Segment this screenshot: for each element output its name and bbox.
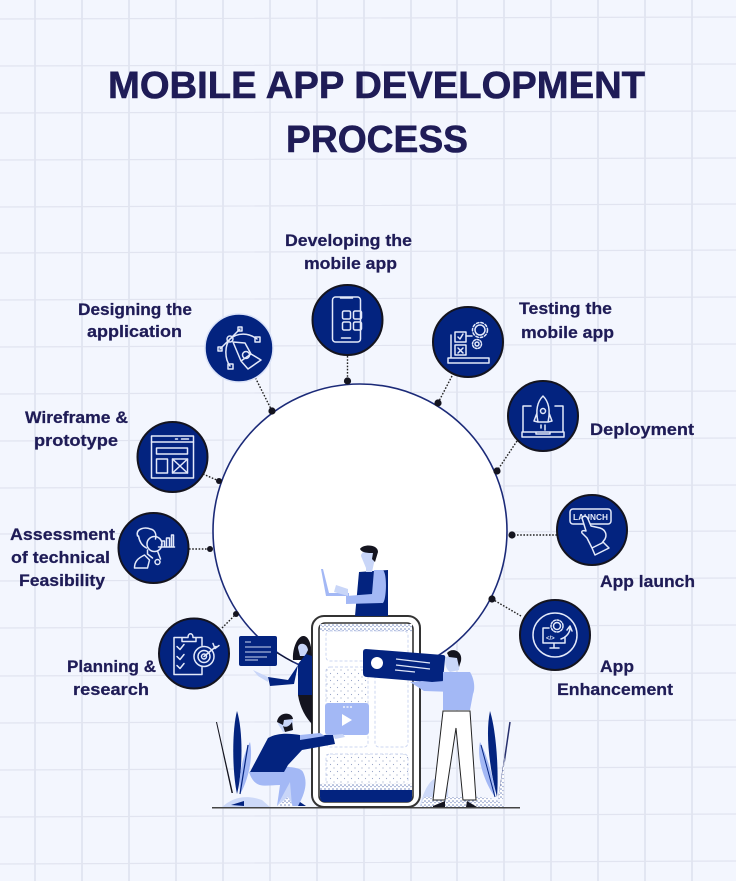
icon: rocket on laptop [508,381,578,451]
icon: monitor with gear [520,600,590,670]
icon: wireframe window [138,422,208,492]
ground shadows [222,778,448,807]
step: developing the mobile app: Developing the [285,231,412,250]
step: deployment: Deployment [590,420,694,439]
step: assessment of technical feasibility: Assessment [10,525,115,544]
step: wireframe and prototype [25,408,208,492]
step: developing the mobile app [285,231,412,355]
title: PROCESS [286,119,468,161]
step: wireframe and prototype: Wireframe & [25,408,128,427]
step: wireframe and prototype: prototype [34,431,118,450]
speech card held by woman [239,636,293,666]
step: planning and research [67,618,229,699]
central white circle [213,384,507,678]
icon: phone with app grid [312,285,382,355]
step: designing the application: Designing the [78,300,192,319]
video card [325,703,369,735]
step: designing the application: application [87,322,182,341]
left plant [216,711,251,794]
right plant [479,711,510,800]
step: developing the mobile app: mobile app [304,254,397,273]
title [108,65,645,161]
step: app launch: App launch [600,572,695,591]
person seated on phone with laptop [321,546,388,616]
step: app enhancement: App [600,657,634,676]
step: assessment of technical feasibility: Feasibility [19,571,106,590]
step: app launch [557,495,695,591]
icon: clipboard with target [159,618,229,688]
step: testing the mobile app [433,299,614,377]
step: testing the mobile app: mobile app [521,323,614,342]
step: planning and research: Planning & [67,657,156,676]
icon: finger pressing launch button: LAUNCH [573,512,608,522]
step: planning and research: research [73,680,149,699]
kneeling man [231,714,345,806]
ground speckle [420,797,505,807]
phone [312,616,420,807]
standing man [410,650,477,807]
banner card [363,649,445,683]
step: testing the mobile app: Testing the [519,299,612,318]
woman beside phone [253,636,312,724]
illustration: team building mobile app [212,546,520,808]
icon: pen tool [205,314,273,382]
step: assessment of technical feasibility [10,513,188,590]
connectors [189,356,557,628]
icon: analyst with magnifier and bars [118,513,188,583]
step: app enhancement [520,600,673,699]
step: app enhancement: Enhancement [557,680,673,699]
step: deployment [508,381,694,451]
icon: monitor with gear: </> [546,636,555,642]
icon: checklist with gears [433,307,503,377]
step: designing the application [78,300,273,382]
step: assessment of technical feasibility: of technical [11,548,110,567]
ground line [212,807,520,808]
title: MOBILE APP DEVELOPMENT [108,65,645,107]
